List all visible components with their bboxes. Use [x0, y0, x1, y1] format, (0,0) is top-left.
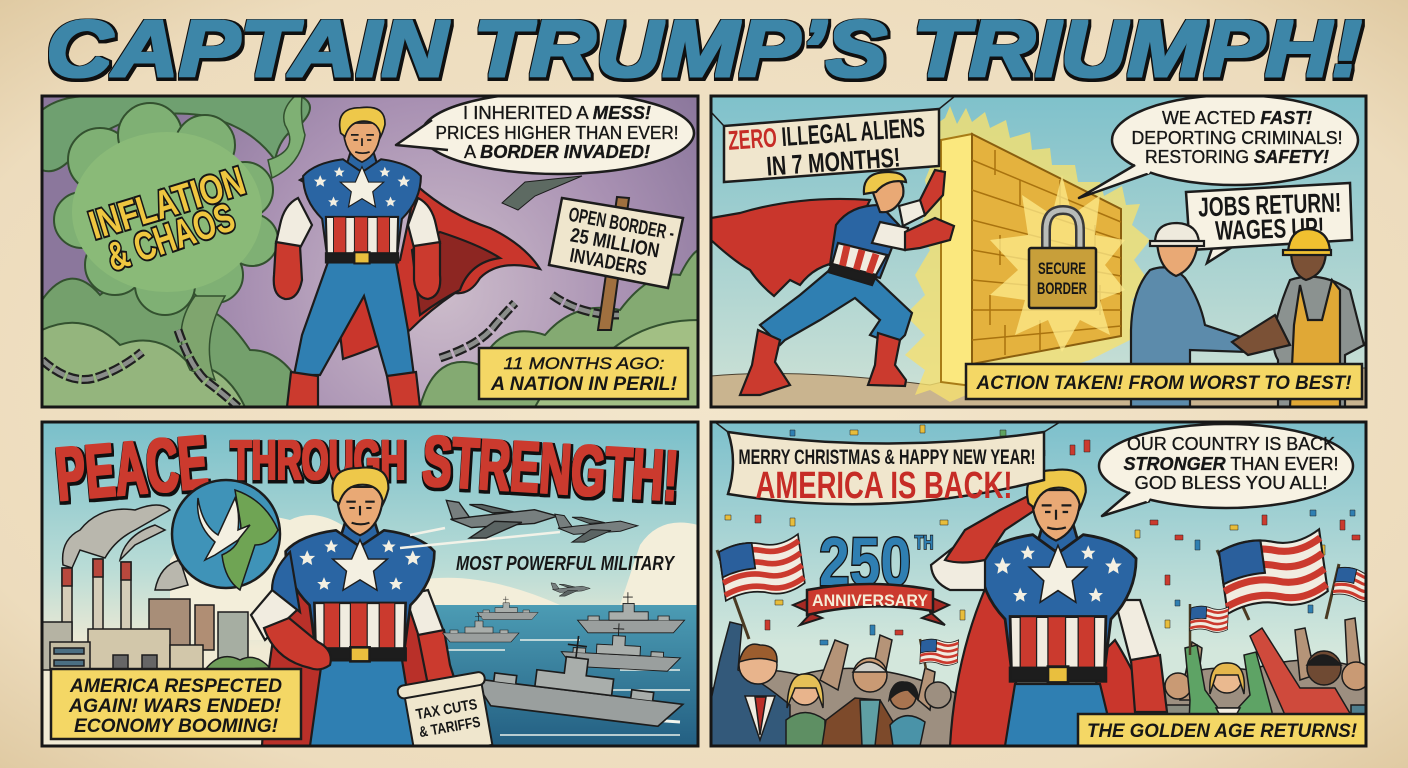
scroll: tax cuts and tariffs: TAX CUTS — [415, 696, 479, 723]
green smoke cloud — [42, 96, 698, 407]
banner: merry christmas — [715, 422, 1060, 507]
scroll: tax cuts and tariffs: & TARIFFS — [418, 714, 482, 741]
caption: A NATION IN PERIL! — [490, 374, 677, 395]
speech bubble — [396, 92, 694, 174]
speech bubble: jobs return: WAGES UP! — [1215, 212, 1325, 246]
woman — [786, 712, 825, 746]
caption — [479, 348, 688, 399]
banner: zero illegal aliens: ZERO ILLEGAL ALIENS — [727, 112, 926, 156]
confetti — [725, 425, 1360, 646]
heading: peace through strength: PEACE — [52, 420, 211, 518]
banner: zero illegal aliens — [711, 96, 955, 182]
speech bubble: STRONGER THAN EVER! — [1124, 454, 1338, 474]
speech bubble: we acted fast: RESTORING SAFETY! — [1145, 147, 1329, 167]
right crowd — [1165, 673, 1191, 699]
heading: peace through strength: STRENGTH! — [420, 421, 681, 517]
man in suit — [711, 622, 790, 746]
caption: 11 MONTHS AGO: — [504, 354, 665, 373]
lock radiance — [990, 175, 1125, 352]
panel: a nation in peril — [42, 92, 698, 407]
icon: broken chains — [42, 295, 619, 407]
factory — [42, 505, 270, 670]
warships — [442, 592, 690, 729]
flags — [717, 529, 1382, 669]
speech bubble: OUR COUNTRY IS BACK — [1127, 434, 1335, 454]
badge: 250th anniversary: TH — [914, 533, 934, 554]
speech bubble: I INHERITED A MESS! — [463, 103, 651, 123]
speech bubble: jobs return — [1186, 183, 1352, 263]
speech bubble: we acted fast: DEPORTING CRIMINALS! — [1132, 128, 1342, 148]
worker left — [1131, 223, 1250, 407]
banner: merry christmas: MERRY CHRISTMAS & HAPPY NEW YEAR! — [738, 446, 1036, 469]
speech bubble: GOD BLESS YOU ALL! — [1134, 473, 1328, 493]
panel: action taken — [711, 95, 1366, 407]
jets — [400, 500, 638, 596]
heading: peace through strength: THROUGH — [230, 428, 406, 491]
banner: zero illegal aliens: IN 7 MONTHS! — [765, 142, 901, 182]
globe with dove — [172, 480, 280, 590]
badge: 250th anniversary: 250 — [819, 524, 911, 600]
older man — [822, 698, 898, 746]
hero: standing — [274, 107, 540, 407]
hero: pushing wall — [711, 170, 954, 395]
falling debris trail — [502, 176, 582, 210]
icon: padlock: SECURE — [1038, 259, 1086, 278]
speech bubble: PRICES HIGHER THAN EVER! — [436, 123, 678, 143]
caption: AMERICA RESPECTED — [69, 676, 282, 697]
caption: THE GOLDEN AGE RETURNS! — [1087, 721, 1357, 742]
sign: open border: OPEN BORDER - — [567, 204, 676, 245]
caption — [51, 669, 301, 739]
girl — [890, 716, 925, 746]
speech bubble: A BORDER INVADED! — [464, 142, 650, 162]
icon: padlock — [1029, 210, 1096, 308]
scroll: tax cuts and tariffs — [396, 671, 494, 744]
badge: 250th anniversary: ANNIVERSARY — [812, 591, 929, 610]
caption: ECONOMY BOOMING! — [74, 716, 278, 737]
caption: AGAIN! WARS ENDED! — [68, 696, 281, 717]
speech bubble: jobs return: JOBS RETURN! — [1198, 188, 1342, 222]
speech bubble — [1099, 424, 1353, 516]
speech bubble: we acted fast — [1079, 95, 1358, 198]
badge: 250th anniversary — [793, 524, 949, 625]
heading: inflation and chaos: & CHAOS — [101, 195, 240, 280]
heading: inflation and chaos — [86, 164, 248, 272]
heading: inflation and chaos: INFLATION — [84, 159, 250, 248]
caption — [1078, 714, 1369, 746]
glowing brick wall — [905, 106, 1150, 402]
sign: open border — [549, 197, 683, 330]
caption — [966, 364, 1362, 399]
hero: saluting — [931, 470, 1167, 746]
sea — [430, 605, 698, 746]
banner: merry christmas: AMERICA IS BACK! — [756, 465, 1012, 507]
caption: ACTION TAKEN! FROM WORST TO BEST! — [976, 373, 1352, 394]
sign: open border: 25 MILLION — [569, 224, 661, 262]
panel: america is back — [711, 422, 1382, 746]
panel: peace through strength — [42, 420, 698, 759]
speech bubble: we acted fast: WE ACTED FAST! — [1162, 108, 1312, 128]
crowd — [711, 618, 1370, 746]
heading: peace through strength — [55, 434, 680, 505]
worker right — [1232, 229, 1364, 407]
sign: open border: INVADERS — [568, 245, 649, 280]
hero: bust — [251, 468, 458, 746]
icon: padlock: BORDER — [1037, 279, 1087, 298]
title: CAPTAIN TRUMP’S TRIUMPH! — [46, 4, 1362, 93]
label: most powerful military: MOST POWERFUL MILITARY — [456, 553, 675, 575]
